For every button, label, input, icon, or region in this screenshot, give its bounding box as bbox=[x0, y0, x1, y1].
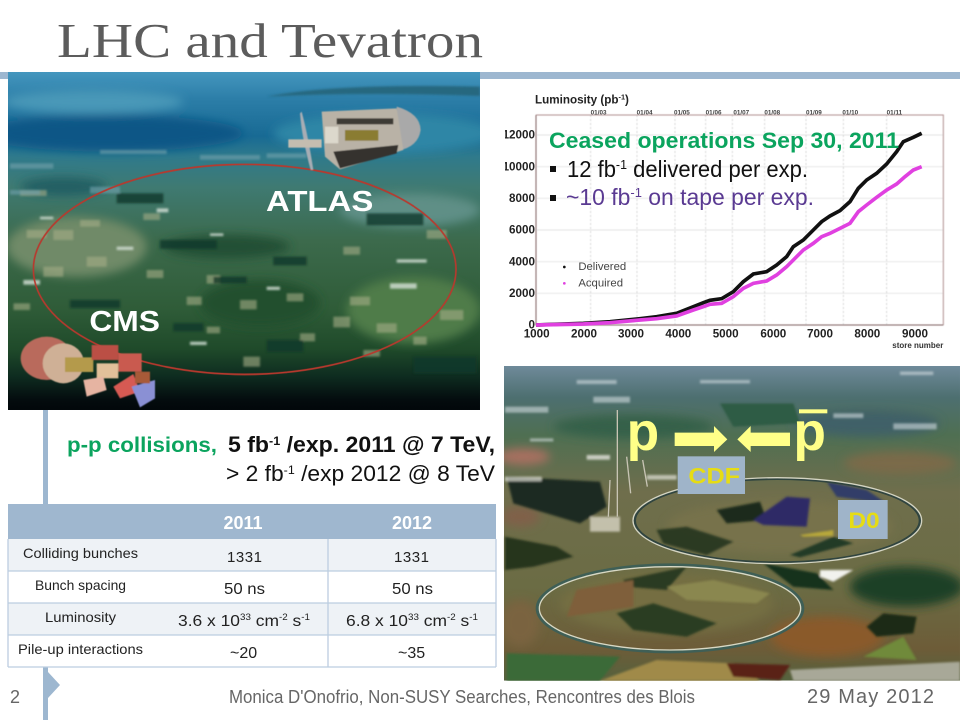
2011 line: -1 bbox=[269, 434, 281, 448]
row: colliding bunches: Colliding bunches bbox=[23, 545, 138, 561]
y axis labels: 10000 bbox=[503, 160, 535, 173]
photo: Tevatron aerial view bbox=[497, 366, 960, 681]
2012 line: > 2 fb bbox=[226, 461, 282, 486]
x axis labels: 7000 bbox=[807, 327, 833, 340]
y axis labels: 6000 bbox=[509, 224, 535, 237]
row: luminosity: 6.8 x 10 bbox=[346, 613, 403, 630]
bullet: on tape: -1 bbox=[630, 185, 642, 200]
bullet: on tape: ~10 fb bbox=[566, 184, 631, 210]
title: LHC and Tevatron bbox=[57, 13, 483, 68]
date ticks: 01/04 bbox=[637, 109, 653, 116]
row: luminosity: s bbox=[456, 613, 469, 630]
p label: p bbox=[627, 403, 659, 462]
header row: 2011 bbox=[223, 513, 263, 533]
LHC ring bbox=[33, 164, 456, 374]
row: bunch spacing bbox=[35, 577, 433, 598]
header row: 2012 bbox=[392, 513, 432, 533]
date ticks: 01/11 bbox=[887, 109, 903, 116]
y axis labels: 8000 bbox=[509, 192, 535, 205]
green lead: p-p collisions, bbox=[67, 434, 217, 457]
table: run parameters bbox=[8, 504, 496, 667]
axis title: Luminosity (pb bbox=[535, 93, 619, 106]
y axis labels: 4000 bbox=[509, 255, 535, 268]
footer bbox=[10, 686, 934, 708]
ATLAS detector bbox=[288, 107, 421, 170]
collisions text bbox=[67, 432, 495, 486]
arrow left bbox=[737, 426, 790, 452]
footer date: 29 May 2012 bbox=[807, 686, 934, 708]
axis title: -1 bbox=[619, 92, 625, 101]
date ticks: 01/06 bbox=[706, 109, 722, 116]
date ticks: 01/09 bbox=[806, 109, 822, 116]
x axis labels: 8000 bbox=[854, 327, 880, 340]
date ticks bbox=[591, 109, 903, 116]
CMS label: CMS bbox=[89, 306, 160, 338]
legend bbox=[563, 261, 626, 290]
y axis labels bbox=[503, 129, 535, 331]
date ticks: 01/08 bbox=[764, 109, 781, 116]
x axis labels bbox=[524, 327, 928, 340]
x axis labels: 1000 bbox=[524, 327, 550, 340]
row: luminosity: -1 bbox=[301, 612, 310, 622]
axis title: ) bbox=[625, 93, 629, 106]
legend: Delivered bbox=[578, 261, 626, 273]
plot frame bbox=[536, 115, 943, 325]
x axis labels: 3000 bbox=[618, 327, 644, 340]
date ticks: 01/10 bbox=[842, 109, 859, 116]
row: colliding bunches bbox=[23, 545, 429, 566]
row: luminosity: Luminosity bbox=[45, 609, 116, 625]
heading: Ceased operations Sep 30, 2011 bbox=[549, 128, 899, 153]
row: luminosity: 33 bbox=[240, 612, 251, 622]
row: luminosity: -2 bbox=[447, 612, 456, 622]
y axis labels: 12000 bbox=[503, 129, 535, 142]
row: luminosity: cm bbox=[251, 613, 279, 630]
2011 line: 5 fb bbox=[228, 432, 267, 457]
header row bbox=[8, 504, 496, 539]
row backgrounds bbox=[8, 539, 496, 667]
row: luminosity: -2 bbox=[279, 612, 288, 622]
y axis labels: 2000 bbox=[509, 287, 535, 300]
acquired curve bbox=[536, 167, 922, 325]
2012 line: /exp 2012 @ 8 TeV bbox=[295, 461, 495, 486]
D0 label: D0 bbox=[848, 508, 880, 533]
bullet: on tape bbox=[550, 184, 814, 210]
2012 line: -1 bbox=[284, 463, 295, 477]
linac line bbox=[608, 410, 647, 517]
row: pile-up interactions: Pile-up interactions bbox=[18, 641, 143, 657]
Tevatron ring bbox=[635, 479, 920, 563]
main injector ring bbox=[537, 565, 803, 652]
chart: Tevatron luminosity bbox=[503, 92, 943, 350]
row: bunch spacing: 50 ns bbox=[224, 581, 265, 598]
CMS detector bbox=[21, 337, 155, 407]
slide number: 2 bbox=[10, 687, 20, 707]
x axis labels: 6000 bbox=[760, 327, 786, 340]
photo: LHC aerial view bbox=[0, 72, 493, 410]
row: pile-up interactions: ~35 bbox=[398, 645, 425, 662]
CDF label: CDF bbox=[688, 464, 740, 489]
row: luminosity bbox=[45, 609, 478, 630]
arrow right bbox=[675, 426, 727, 452]
bullet: delivered: 12 fb bbox=[567, 156, 618, 182]
x axis labels: 2000 bbox=[571, 327, 597, 340]
y axis labels: 0 bbox=[529, 318, 535, 331]
footer credit: Monica D'Onofrio, Non-SUSY Searches, Rencontres des Blois bbox=[229, 687, 695, 707]
legend: Acquired bbox=[578, 278, 623, 290]
CDF label bbox=[678, 456, 745, 494]
bullet: on tape: on tape per exp. bbox=[642, 184, 814, 210]
row: bunch spacing: Bunch spacing bbox=[35, 577, 126, 593]
header rule bbox=[0, 72, 960, 79]
row: luminosity: 33 bbox=[408, 612, 419, 622]
row: colliding bunches: 1331 bbox=[394, 549, 429, 566]
x axis title: store number bbox=[892, 341, 943, 350]
x axis labels: 4000 bbox=[665, 327, 691, 340]
row: colliding bunches: 1331 bbox=[227, 549, 262, 566]
row: luminosity: cm bbox=[419, 613, 447, 630]
row: luminosity: -1 bbox=[469, 612, 478, 622]
D0 label bbox=[838, 500, 888, 539]
row: pile-up interactions: ~20 bbox=[230, 645, 257, 662]
delivered curve bbox=[536, 133, 922, 325]
row: bunch spacing: 50 ns bbox=[392, 581, 433, 598]
date ticks: 01/07 bbox=[733, 109, 750, 116]
antiproton label: p bbox=[793, 403, 826, 462]
x axis labels: 5000 bbox=[713, 327, 739, 340]
side rail bbox=[43, 405, 60, 720]
ATLAS label: ATLAS bbox=[266, 186, 373, 218]
callout: Tevatron status bbox=[549, 128, 899, 210]
row: luminosity: s bbox=[288, 613, 301, 630]
row: pile-up interactions bbox=[18, 641, 425, 662]
bullet: delivered bbox=[550, 156, 808, 182]
row: luminosity: 3.6 x 10 bbox=[178, 613, 235, 630]
date ticks: 01/03 bbox=[591, 109, 607, 116]
date ticks: 01/05 bbox=[674, 109, 690, 116]
2011 line: /exp. 2011 @ 7 TeV, bbox=[280, 432, 495, 457]
bullet: delivered: delivered per exp. bbox=[627, 156, 808, 182]
x axis labels: 9000 bbox=[902, 327, 928, 340]
bullet: delivered: -1 bbox=[616, 157, 627, 172]
